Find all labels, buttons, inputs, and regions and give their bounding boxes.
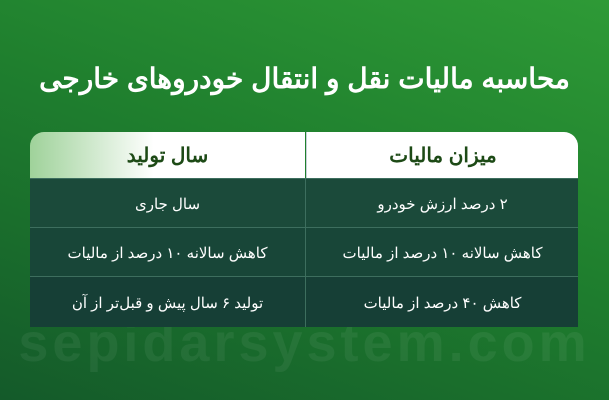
- row 1: [30, 178, 578, 228]
- header: tax amount: میزان مالیات: [389, 144, 497, 166]
- row 1: سال جاری: [135, 196, 200, 212]
- row 3: تولید ۶ سال پیش و قبل‌تر از آن: [72, 294, 263, 312]
- watermark: sepidarsystem.com: [18, 313, 591, 373]
- row 2: کاهش سالانه ۱۰ درصد از مالیات: [68, 244, 267, 262]
- header: production year: سال تولید: [127, 144, 208, 166]
- row 2: [30, 227, 578, 277]
- row 1: ۲ درصد ارزش خودرو: [377, 196, 508, 212]
- row 2: کاهش سالانه ۱۰ درصد از مالیات: [343, 244, 542, 262]
- title: محاسبه مالیات نقل و انتقال خودروهای خارجی: [39, 63, 570, 94]
- table: [30, 132, 578, 327]
- header: tax amount: [306, 132, 579, 178]
- row 3: [30, 276, 578, 328]
- row 3: کاهش ۴۰ درصد از مالیات: [364, 294, 521, 312]
- header: production year: [30, 132, 305, 178]
